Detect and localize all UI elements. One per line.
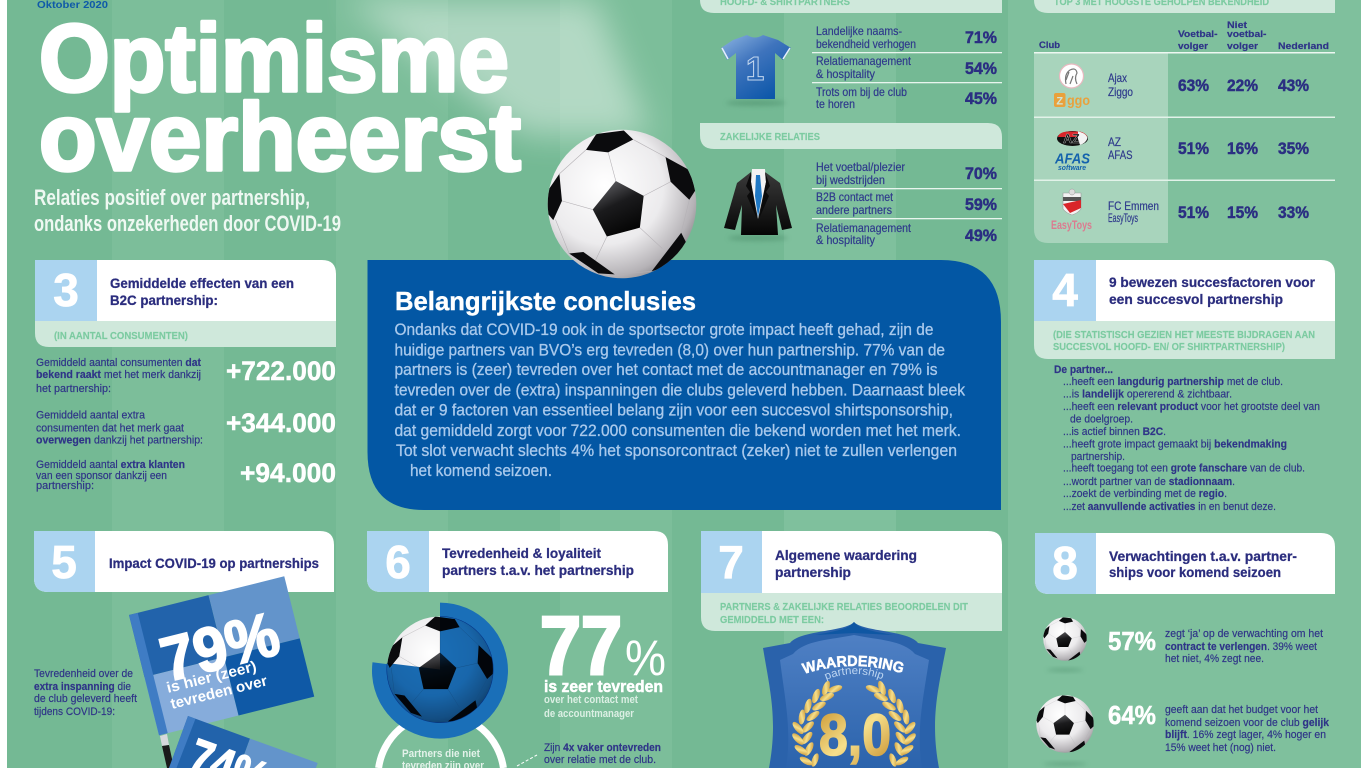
stat: 57%	[1108, 626, 1323, 665]
row: AZ AFAS: AZ	[1108, 135, 1121, 149]
stat: 77%: 77	[540, 599, 622, 692]
text: tevredenheid extra inspanning: Tevredenheid over de	[34, 668, 133, 680]
header 7: 7	[718, 536, 744, 588]
stat: 64%: 64%	[1108, 700, 1156, 730]
row: Ajax Ziggo: Ziggo	[1108, 85, 1133, 99]
white ring with text	[379, 714, 503, 768]
panel: belangrijkste conclusies	[368, 260, 1001, 510]
header 4: 9 bewezen succesfactoren voor	[1109, 275, 1316, 290]
list of factors: ...zoekt de verbinding met de regio.	[1063, 488, 1227, 500]
logo: EasyToys: EasyToys	[1051, 218, 1092, 232]
donut chart with football: 77%	[372, 603, 508, 739]
row: relatiemanagement 54%: 54%	[965, 59, 997, 78]
header 8: Verwachtingen t.a.v. partner-	[1109, 549, 1297, 564]
flag: 79%: 79%	[154, 600, 286, 695]
row: trots 45%	[816, 85, 997, 111]
panel: top 3 table	[1034, 0, 1335, 243]
row: relatiemanagement 54%: & hospitality	[816, 67, 875, 81]
header 3: Gemiddelde effecten van een	[110, 276, 294, 291]
row: trots 45%: te horen	[816, 97, 855, 111]
stat: 57%: 57%	[1108, 626, 1156, 656]
stat: klanten +94.000: +94.000	[240, 458, 336, 488]
icon: blue shirt: 1	[746, 50, 764, 87]
text: tevredenheid extra inspanning: extra inspanning die	[34, 681, 131, 693]
subheading 7	[701, 593, 1002, 631]
heading strip: zakelijke relaties	[700, 123, 1002, 149]
list of factors: ...zet aanvullende activaties in en benut deze.	[1063, 501, 1276, 513]
stat: overwegen +344.000: consumenten dat het merk gaat	[36, 423, 184, 435]
header 7: partnership	[775, 565, 851, 580]
conclusions text: het komend seizoen.	[410, 462, 552, 480]
row: naamsbekendheid 71%: Landelijke naams-	[816, 24, 902, 38]
panel 3: gemiddelde effecten	[35, 260, 336, 492]
list of factors: ...is actief binnen B2C.	[1063, 426, 1166, 438]
stat: 64%: geeft aan dat het budget voor het	[1165, 704, 1318, 716]
row: relatiemanagement 49%: & hospitality	[816, 233, 875, 247]
list of factors: De partner...	[1054, 364, 1113, 376]
heading: belangrijkste conclusies: Belangrijkste conclusies	[395, 286, 696, 316]
row: relatiemanagement 49%: Relatiemanagement	[816, 221, 912, 235]
list of factors: ...is landelijk opererend & zichtbaar.	[1063, 389, 1232, 401]
stat: 77%	[540, 599, 666, 720]
header 5: 5	[51, 536, 77, 588]
conclusions text: Ondanks dat COVID-19 ook in de sportsector grote impact heeft gehad, zijn de	[394, 321, 934, 339]
row: b2b 59%: B2B contact met	[816, 190, 894, 204]
logo: AFAS: AFAS	[1054, 150, 1090, 168]
logo: Ziggo: ggo	[1067, 92, 1090, 108]
row: Ajax Ziggo: 22%	[1227, 76, 1258, 95]
subheading 4	[1034, 321, 1335, 359]
row: FC Emmen EasyToys: 33%	[1278, 203, 1309, 222]
row: AZ AFAS: 35%	[1278, 139, 1309, 158]
header 7	[701, 531, 1002, 593]
stat: 77%: is zeer tevreden	[544, 677, 663, 696]
stat: 64%	[1108, 700, 1330, 754]
title: Optimisme	[39, 5, 509, 112]
table header: Nederland	[1278, 41, 1329, 52]
panel: zakelijke relaties	[700, 123, 1002, 247]
row: Ajax Ziggo: 43%	[1278, 76, 1309, 95]
row: Ajax Ziggo	[1108, 71, 1309, 99]
header 5	[34, 531, 334, 592]
stat: 77%: over het contact met	[544, 694, 638, 706]
title	[39, 5, 521, 191]
icon: small football 1	[1043, 617, 1087, 672]
stat: bekend +722.000: bekend raakt met het merk dankzij	[36, 369, 201, 381]
stat: overwegen +344.000: +344.000	[226, 408, 336, 438]
conclusions text: tevreden over de (extra) inspanningen die clubs geleverd hebben. Daarnaast bleek	[394, 382, 966, 400]
row: Ajax Ziggo: 63%	[1178, 76, 1209, 95]
row: naamsbekendheid 71%: bekendheid verhogen	[816, 37, 916, 51]
row: AZ AFAS: 51%	[1178, 139, 1209, 158]
flag: 79%: is hier (zeer)	[165, 658, 258, 697]
stat: 77%: de accountmanager	[544, 708, 635, 720]
stat: 57%: het niet, 4% zegt nee.	[1165, 653, 1264, 665]
header 3	[35, 260, 336, 321]
text: tevredenheid extra inspanning	[34, 668, 137, 718]
header 4	[1034, 260, 1335, 321]
table header: Niet	[1227, 20, 1248, 31]
panel 6: tevredenheid & loyaliteit	[367, 531, 668, 768]
table header: volger	[1178, 41, 1208, 52]
stat: klanten +94.000: van een sponsor dankzij een	[36, 470, 167, 482]
conclusions text: Tot slot verwacht slechts 4% het sponsorcontract (zeker) niet te zullen verlengen	[396, 442, 957, 460]
stat: bekend +722.000: het partnership:	[36, 383, 111, 395]
list of factors: partnership.	[1071, 451, 1125, 463]
row: voetbal 70%	[816, 160, 997, 187]
row: Ajax Ziggo: Ajax	[1108, 71, 1127, 85]
panel 5: impact covid-19	[34, 531, 334, 768]
header 6: 6	[385, 536, 411, 588]
row: relatiemanagement 54%	[816, 54, 997, 81]
table header: volger	[1227, 41, 1258, 52]
row: FC Emmen EasyToys: FC Emmen	[1108, 199, 1159, 213]
row: voetbal 70%: Het voetbal/plezier	[816, 160, 905, 174]
header 6: Tevredenheid & loyaliteit	[442, 546, 601, 561]
title: overheerst	[39, 84, 521, 191]
row: b2b 59%: 59%	[965, 195, 997, 214]
heading strip: zakelijke relaties: ZAKELIJKE RELATIES	[720, 131, 820, 143]
logo: AZ	[1057, 131, 1088, 146]
conclusions text: dat er 9 factoren van essentieel belang zijn voor een succesvol shirtsponsorship,	[394, 402, 953, 420]
subheading 3	[35, 321, 336, 347]
flag: 79%: tevreden over	[169, 672, 269, 713]
table header: voetbal-	[1227, 29, 1266, 40]
header 7: Algemene waardering	[775, 548, 917, 563]
callout: 4x vaker ontevreden: over relatie met de club.	[544, 754, 656, 766]
list of factors	[1054, 364, 1320, 513]
callout: 4x vaker ontevreden	[517, 742, 661, 766]
list of factors: ...heeft grote impact gemaakt bij bekendmaking	[1063, 439, 1287, 451]
stat: 57%: contract te verlengen. 39% weet	[1165, 641, 1317, 653]
stat: bekend +722.000: Gemiddeld aantal consumenten dat	[36, 357, 201, 369]
list of factors: ...wordt partner van de stadionnaam.	[1063, 476, 1235, 488]
badge: waardering 8,0	[763, 622, 946, 768]
header 6	[367, 531, 668, 592]
logo: AFAS: software	[1058, 165, 1086, 172]
row: trots 45%: Trots om bij de club	[816, 85, 907, 99]
logo: FC Emmen	[1063, 189, 1081, 215]
panel 8: verwachtingen	[1035, 533, 1335, 766]
stat: overwegen +344.000	[36, 408, 336, 447]
header 6: partners t.a.v. het partnership	[442, 563, 634, 578]
stat: 64%: 15% weet het (nog) niet.	[1165, 742, 1276, 754]
conclusions text: partners is (zeer) tevreden over het contact met de accountmanager en 79% is	[394, 361, 938, 379]
row: relatiemanagement 49%: 49%	[965, 226, 997, 245]
badge: waardering 8,0: WAARDERING	[800, 655, 904, 674]
subtitle: ondanks onzekerheden door COVID-19	[34, 211, 341, 236]
row: FC Emmen EasyToys: 15%	[1227, 203, 1258, 222]
flag pole	[160, 734, 174, 768]
stat: 64%: blijft. 16% zegt lager, 4% hoger en	[1165, 729, 1326, 741]
subheading 3: (IN AANTAL CONSUMENTEN)	[54, 330, 188, 342]
callout: 4x vaker ontevreden: Zijn 4x vaker ontevreden	[544, 742, 661, 754]
row: trots 45%: 45%	[965, 89, 997, 108]
stat: klanten +94.000: partnership:	[36, 480, 94, 492]
stat: klanten +94.000	[36, 458, 336, 492]
logo: AZ: AZ	[1063, 132, 1080, 146]
stat: bekend +722.000	[36, 356, 336, 395]
icon: black suit	[724, 169, 792, 241]
list of factors: ...heeft een langdurig partnership met de club.	[1063, 376, 1283, 388]
stat: 57%: zegt ‘ja’ op de verwachting om het	[1165, 628, 1323, 640]
header 4: een succesvol partnership	[1109, 292, 1283, 307]
header 8: ships voor komend seizoen	[1109, 565, 1281, 580]
subheading 7: PARTNERS & ZAKELIJKE RELATIES BEOORDELEN DIT	[720, 601, 969, 613]
row: AZ AFAS	[1108, 135, 1309, 162]
badge: waardering 8,0: partnership	[824, 668, 884, 682]
header 8	[1035, 533, 1335, 594]
badge: waardering 8,0: 8,0	[819, 703, 891, 768]
subtitle	[34, 185, 341, 236]
row: AZ AFAS: 16%	[1227, 139, 1258, 158]
header 4: 4	[1052, 264, 1078, 316]
row: FC Emmen EasyToys	[1108, 199, 1309, 225]
stat: klanten +94.000: Gemiddeld aantal extra klanten	[36, 459, 185, 471]
flag: 79%	[129, 576, 314, 735]
subheading 4: SUCCESVOL HOOFD- EN/ OF SHIRTPARTNERSHIP)	[1053, 341, 1285, 353]
logo: Ziggo	[1054, 92, 1090, 108]
conclusions text: huidige partners van BVO’s erg tevreden (8,0) over hun partnership. 77% van de	[394, 341, 945, 359]
logo: Ajax	[1060, 64, 1084, 88]
stat: 64%: komend seizoen voor de club gelijk	[1165, 717, 1330, 729]
row: AZ AFAS: AFAS	[1108, 148, 1132, 162]
list of factors: de doelgroep.	[1070, 414, 1133, 426]
panel: hoofd- & shirtpartners	[700, 0, 1002, 111]
list of factors: ...heeft toegang tot een grote fanschare van de club.	[1063, 463, 1305, 475]
row: relatiemanagement 54%: Relatiemanagement	[816, 54, 912, 68]
panel 4: succesfactoren	[1034, 260, 1335, 513]
heading strip: hoofd- & shirtpartners	[700, 0, 1002, 13]
panel 7: algemene waardering	[701, 531, 1002, 768]
row: voetbal 70%: 70%	[965, 164, 997, 183]
logo: Ziggo: Z	[1056, 96, 1063, 108]
conclusions text: dat gemiddeld zorgt voor 722.000 consumenten die bekend worden met het merk.	[394, 422, 961, 440]
row: relatiemanagement 49%	[816, 221, 997, 247]
icon: large football	[530, 113, 713, 295]
stat: overwegen +344.000: overwegen dankzij het partnership:	[36, 435, 203, 447]
text: tevredenheid extra inspanning: de club geleverd heeft	[34, 693, 137, 705]
subheading 4: (DIE STATISTISCH GEZIEN HET MEESTE BIJDRAGEN AAN	[1053, 329, 1315, 341]
text: tevredenheid extra inspanning: tijdens COVID-19:	[34, 706, 115, 718]
row: naamsbekendheid 71%	[816, 24, 997, 51]
row: naamsbekendheid 71%: 71%	[965, 28, 997, 47]
header 3: 3	[53, 264, 79, 316]
table header: Club	[1039, 40, 1060, 51]
header 8: 8	[1052, 537, 1078, 589]
white ring with text: Partners die niet	[402, 748, 480, 760]
header 5: Impact COVID-19 op partnerships	[109, 556, 319, 571]
list of factors: ...heeft een relevant product voor het grootste deel van	[1063, 401, 1320, 413]
subheading 7: GEMIDDELD MET EEN:	[720, 614, 824, 626]
row: b2b 59%	[816, 190, 997, 217]
row: FC Emmen EasyToys: 51%	[1178, 203, 1209, 222]
stat: 77%: %	[625, 630, 666, 686]
conclusions text	[394, 321, 966, 480]
row: voetbal 70%: bij wedstrijden	[816, 173, 885, 187]
table header	[1039, 20, 1329, 52]
row: b2b 59%: andere partners	[816, 203, 892, 217]
stat: overwegen +344.000: Gemiddeld aantal extra	[36, 410, 146, 422]
icon: blue shirt	[721, 35, 791, 106]
row: FC Emmen EasyToys: EasyToys	[1108, 211, 1138, 225]
flag: 74%	[169, 716, 318, 768]
icon: small football 2	[1036, 695, 1094, 766]
header 3: B2C partnership:	[110, 293, 218, 308]
heading strip: top 3	[1034, 0, 1335, 13]
stat: bekend +722.000: +722.000	[226, 356, 336, 386]
table header: Voetbal-	[1178, 29, 1218, 40]
subtitle: Relaties positief over partnership,	[34, 185, 310, 210]
